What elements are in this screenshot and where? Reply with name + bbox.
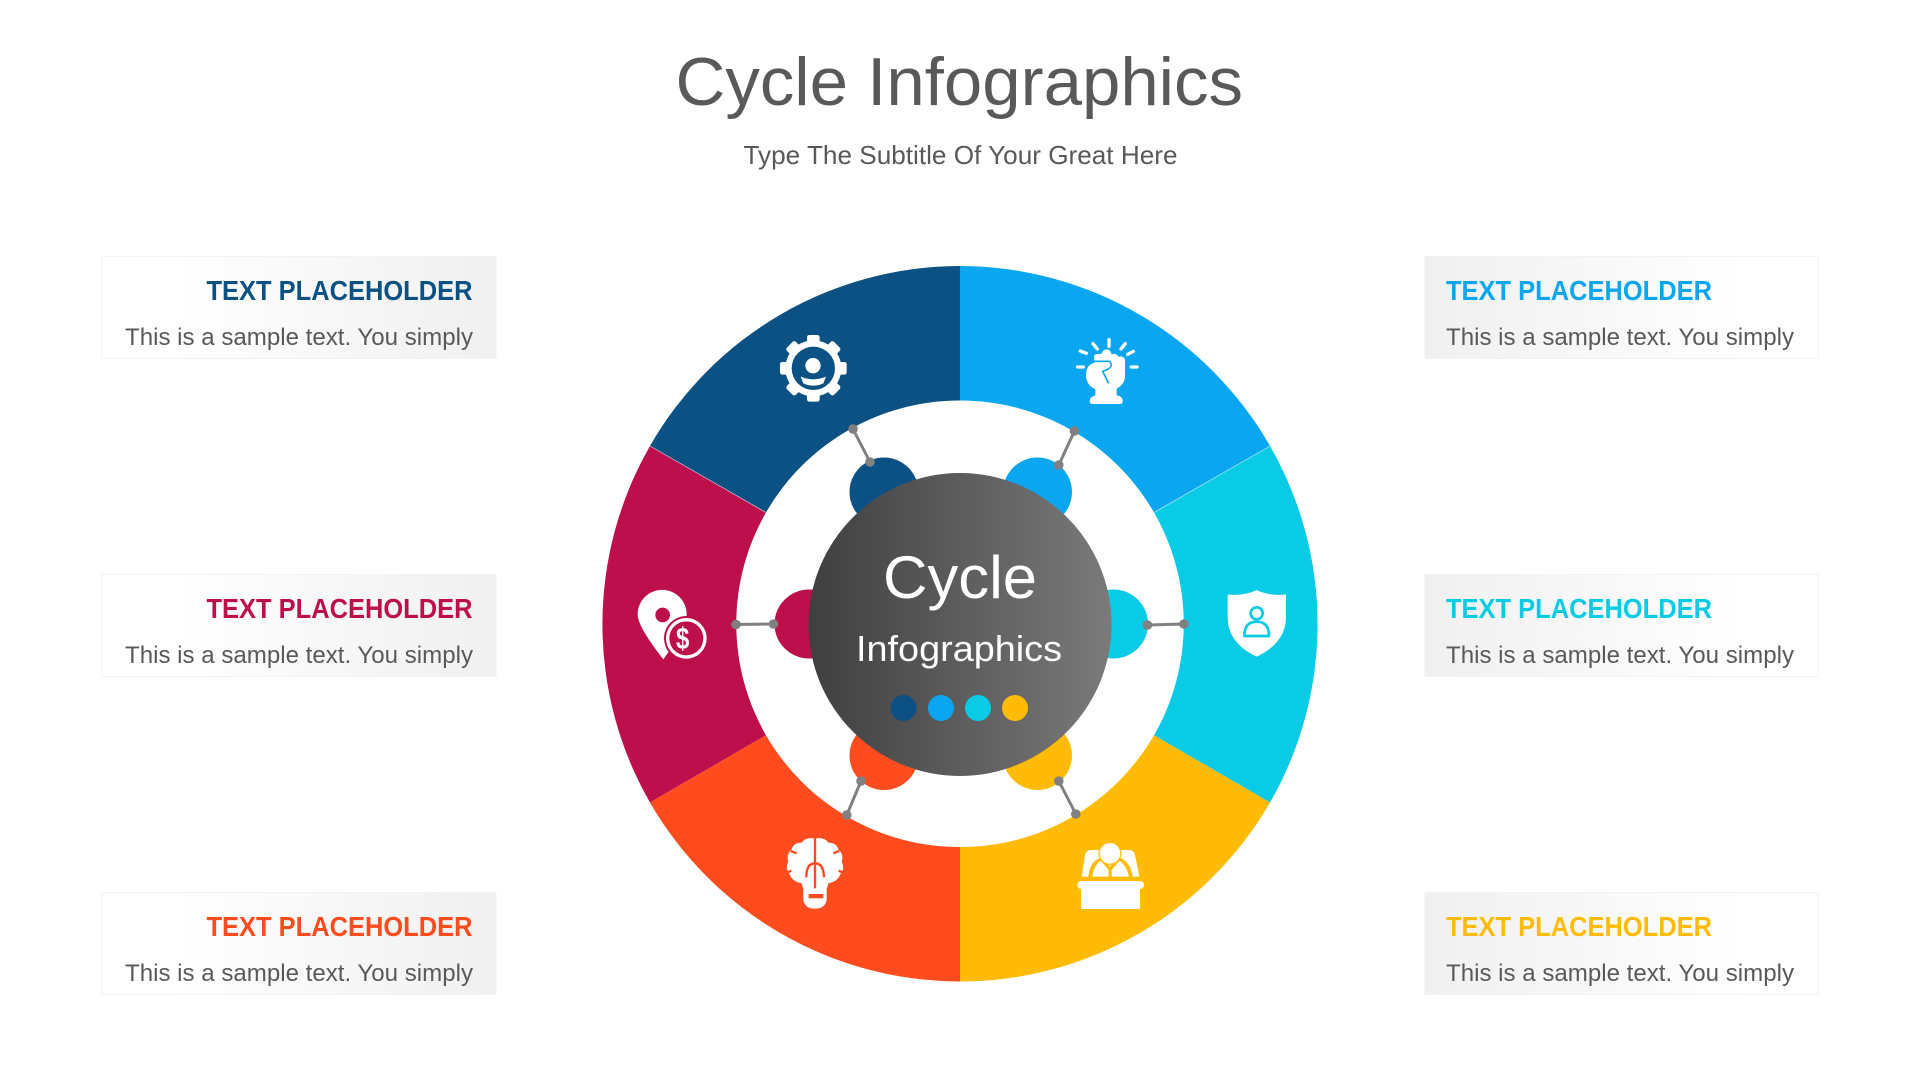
- body text: This is a sample text. You simply: [1446, 960, 1795, 987]
- center title: Cycle: [883, 544, 1037, 611]
- panel: bottom left text: [102, 892, 496, 994]
- panel: middle right text: [1425, 574, 1818, 676]
- segment: crimson: [602, 446, 766, 802]
- cycle ring: [602, 266, 1318, 982]
- body text: This is a sample text. You simply: [125, 642, 474, 669]
- segment: navy: [650, 266, 960, 512]
- heading: TEXT PLACEHOLDER: [206, 593, 472, 624]
- heading: TEXT PLACEHOLDER: [1446, 593, 1712, 624]
- body text: This is a sample text. You simply: [1446, 324, 1795, 351]
- icon: speaker at podium: [1077, 842, 1144, 909]
- small hub circles: [774, 458, 1148, 790]
- icon: location pin with dollar coin: $: [676, 622, 689, 656]
- panel: top right text: [1425, 256, 1818, 358]
- segment: cyan: [1154, 446, 1318, 802]
- heading: TEXT PLACEHOLDER: [206, 911, 472, 942]
- segment: orange: [650, 735, 960, 982]
- center subtitle: Infographics: [856, 628, 1062, 669]
- center disc: [808, 473, 1112, 776]
- body text: This is a sample text. You simply: [125, 960, 474, 987]
- heading: TEXT PLACEHOLDER: [206, 275, 472, 306]
- subtitle: Type The Subtitle Of Your Great Here: [744, 140, 1178, 170]
- body text: This is a sample text. You simply: [125, 324, 474, 351]
- icon: shield with person: [1228, 590, 1286, 657]
- connectors: [731, 424, 1189, 820]
- panel: top left text: [102, 256, 496, 358]
- segment: yellow: [960, 735, 1270, 982]
- panel: middle left text: [102, 574, 496, 676]
- color dots: [890, 695, 1028, 721]
- title: Cycle Infographics: [676, 44, 1243, 120]
- icon: raised fist: [1078, 340, 1137, 404]
- body text: This is a sample text. You simply: [1446, 642, 1795, 669]
- heading: TEXT PLACEHOLDER: [1446, 275, 1712, 306]
- icon: gear with person: [780, 335, 847, 402]
- heading: TEXT PLACEHOLDER: [1446, 911, 1712, 942]
- panel: bottom right text: [1425, 892, 1818, 994]
- icon: brain bulb: [787, 837, 843, 909]
- segment: blue: [960, 266, 1270, 512]
- icon: location pin with dollar coin: [638, 590, 709, 661]
